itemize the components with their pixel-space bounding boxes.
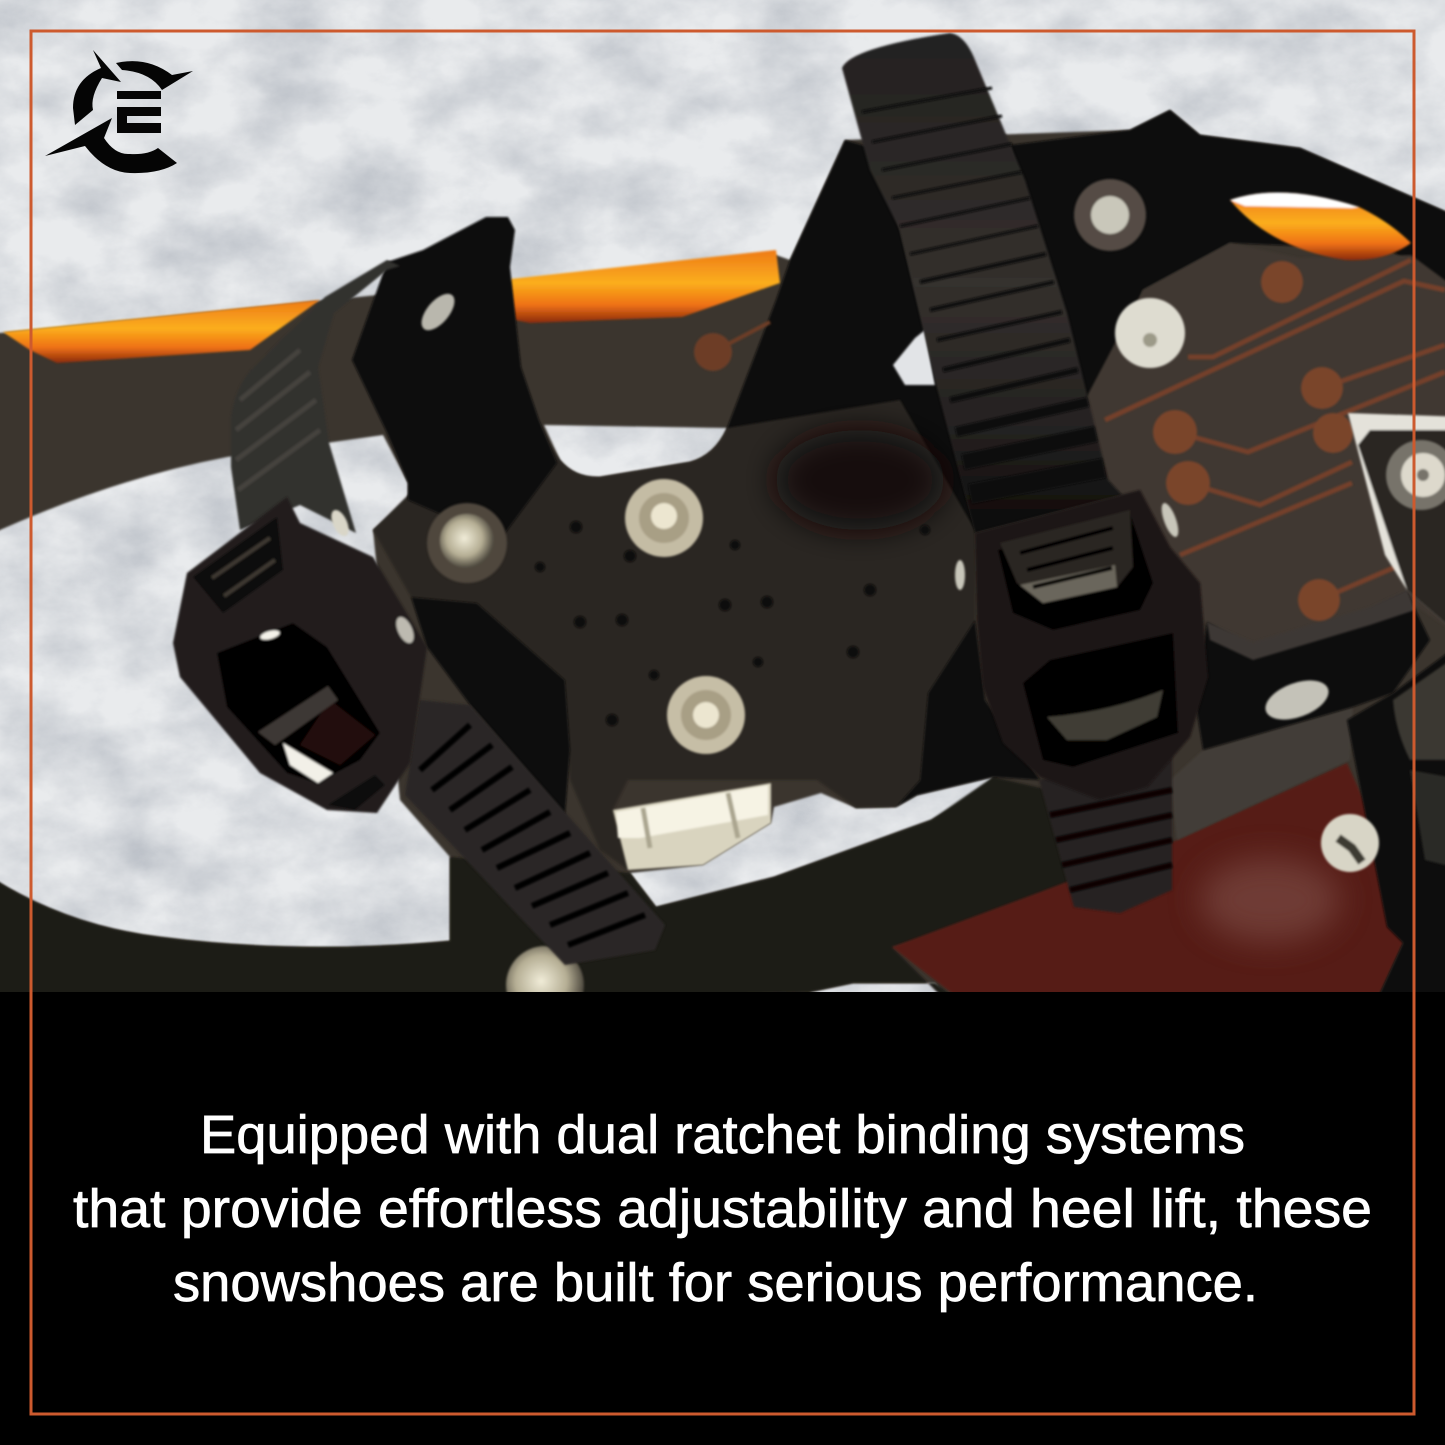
rivets bbox=[415, 179, 1445, 1024]
arch ribs bbox=[236, 350, 320, 490]
logo: upper-left blade bbox=[73, 50, 121, 125]
grey band above red deck bbox=[1170, 707, 1353, 840]
left buckle window bbox=[217, 623, 380, 783]
rivet: lower deck screw bbox=[1321, 814, 1379, 872]
brand logo bbox=[45, 50, 193, 173]
bottom caption panel bbox=[0, 992, 1445, 1445]
caption line 1: Equipped with dual ratchet binding systems bbox=[200, 1105, 1245, 1165]
right buckle lever lip bbox=[1020, 565, 1117, 603]
left ratchet strap tail bbox=[405, 700, 665, 965]
black wedge behind left buckle bbox=[411, 597, 570, 815]
rivet: hinge bbox=[1260, 673, 1334, 727]
rivet: top right bbox=[1074, 179, 1146, 251]
logo: upper-right blade bbox=[116, 61, 193, 90]
left buckle lower slot bbox=[328, 775, 385, 810]
black vertical post at right bbox=[1347, 640, 1445, 1015]
right deck panel bbox=[1085, 243, 1445, 647]
left buckle top box bbox=[193, 517, 283, 613]
black upper-right plate bbox=[1010, 110, 1445, 400]
rivet: plate top bbox=[625, 479, 703, 557]
circuit traces bbox=[1105, 260, 1445, 621]
orange frame stripe: left section bbox=[3, 300, 320, 363]
grey highlight on hinge arm bbox=[1207, 590, 1415, 660]
right buckle upper window bbox=[998, 513, 1153, 630]
left buckle white gap bbox=[283, 743, 333, 783]
rivet: bottom ball bbox=[506, 946, 584, 1024]
circuit dot and trace on left deck bbox=[694, 322, 770, 371]
caption line 2: that provide effortless adjustability and heel lift, these bbox=[73, 1179, 1372, 1239]
left toe strap arch bbox=[231, 260, 400, 533]
plate perforations bbox=[535, 521, 930, 726]
heel catch ribs bbox=[643, 793, 738, 848]
left buckle highlight bbox=[259, 629, 281, 641]
right buckle lever bbox=[1000, 510, 1133, 603]
right buckle lower window bbox=[1023, 633, 1178, 767]
rivet: plate bottom bbox=[667, 676, 745, 754]
lower dark frame band bbox=[0, 777, 1074, 1015]
rivet: post hole bbox=[415, 288, 461, 336]
right buckle lever grooves bbox=[1020, 528, 1113, 587]
black hinge arm bbox=[1195, 592, 1430, 750]
red-brown lower deck bbox=[892, 763, 1403, 1015]
silver heel catch bbox=[613, 783, 771, 870]
lighter red glow on lower deck bbox=[1200, 858, 1340, 942]
orange frame stripe: middle section bbox=[510, 250, 780, 323]
left upright toe post bbox=[352, 217, 557, 540]
right strap tail ribs bbox=[1050, 790, 1172, 890]
snow background bbox=[0, 0, 1445, 992]
right buckle window bar bbox=[1047, 690, 1163, 740]
right ratchet strap bbox=[842, 33, 1122, 533]
caption text bbox=[73, 1105, 1372, 1313]
grey right-edge block bbox=[1393, 650, 1445, 760]
rivet: plate left bbox=[427, 503, 507, 583]
left ratchet buckle bbox=[173, 497, 427, 813]
left strap ribs bbox=[420, 725, 645, 945]
left buckle window glow bbox=[300, 700, 375, 765]
right ratchet buckle bbox=[955, 490, 1208, 800]
left buckle bar bbox=[258, 686, 338, 745]
rivet: deck white bbox=[1115, 298, 1185, 368]
black upright plate left of right strap bbox=[727, 140, 975, 530]
black wedge under right buckle bbox=[896, 620, 1040, 807]
darker shading on top of plate bbox=[775, 430, 945, 530]
logo: lower blade bbox=[45, 118, 177, 173]
serrated crampon plate at right edge bbox=[1348, 413, 1445, 640]
right strap ribs bbox=[862, 88, 1104, 494]
logo: E letter bbox=[117, 91, 161, 133]
snow notch beside right strap bbox=[893, 330, 935, 385]
orange leaf window at top right bbox=[1230, 192, 1411, 260]
central binding plate bbox=[373, 400, 975, 870]
left buckle box grooves bbox=[212, 538, 275, 596]
right strap: lower tail bbox=[1039, 750, 1172, 913]
grey right-edge teeth bbox=[1410, 770, 1445, 870]
caption line 3: snowshoes are built for serious performance. bbox=[173, 1253, 1258, 1313]
photo: snowshoe binding on snow bbox=[0, 0, 1445, 1024]
left buckle side pin bbox=[393, 614, 417, 646]
right buckle pins bbox=[955, 501, 1182, 590]
rivet: crampon bbox=[1386, 440, 1445, 510]
snowshoe frame silhouette bbox=[0, 110, 1445, 1015]
left buckle pin bbox=[328, 507, 352, 539]
heel catch bright top bbox=[616, 785, 768, 838]
